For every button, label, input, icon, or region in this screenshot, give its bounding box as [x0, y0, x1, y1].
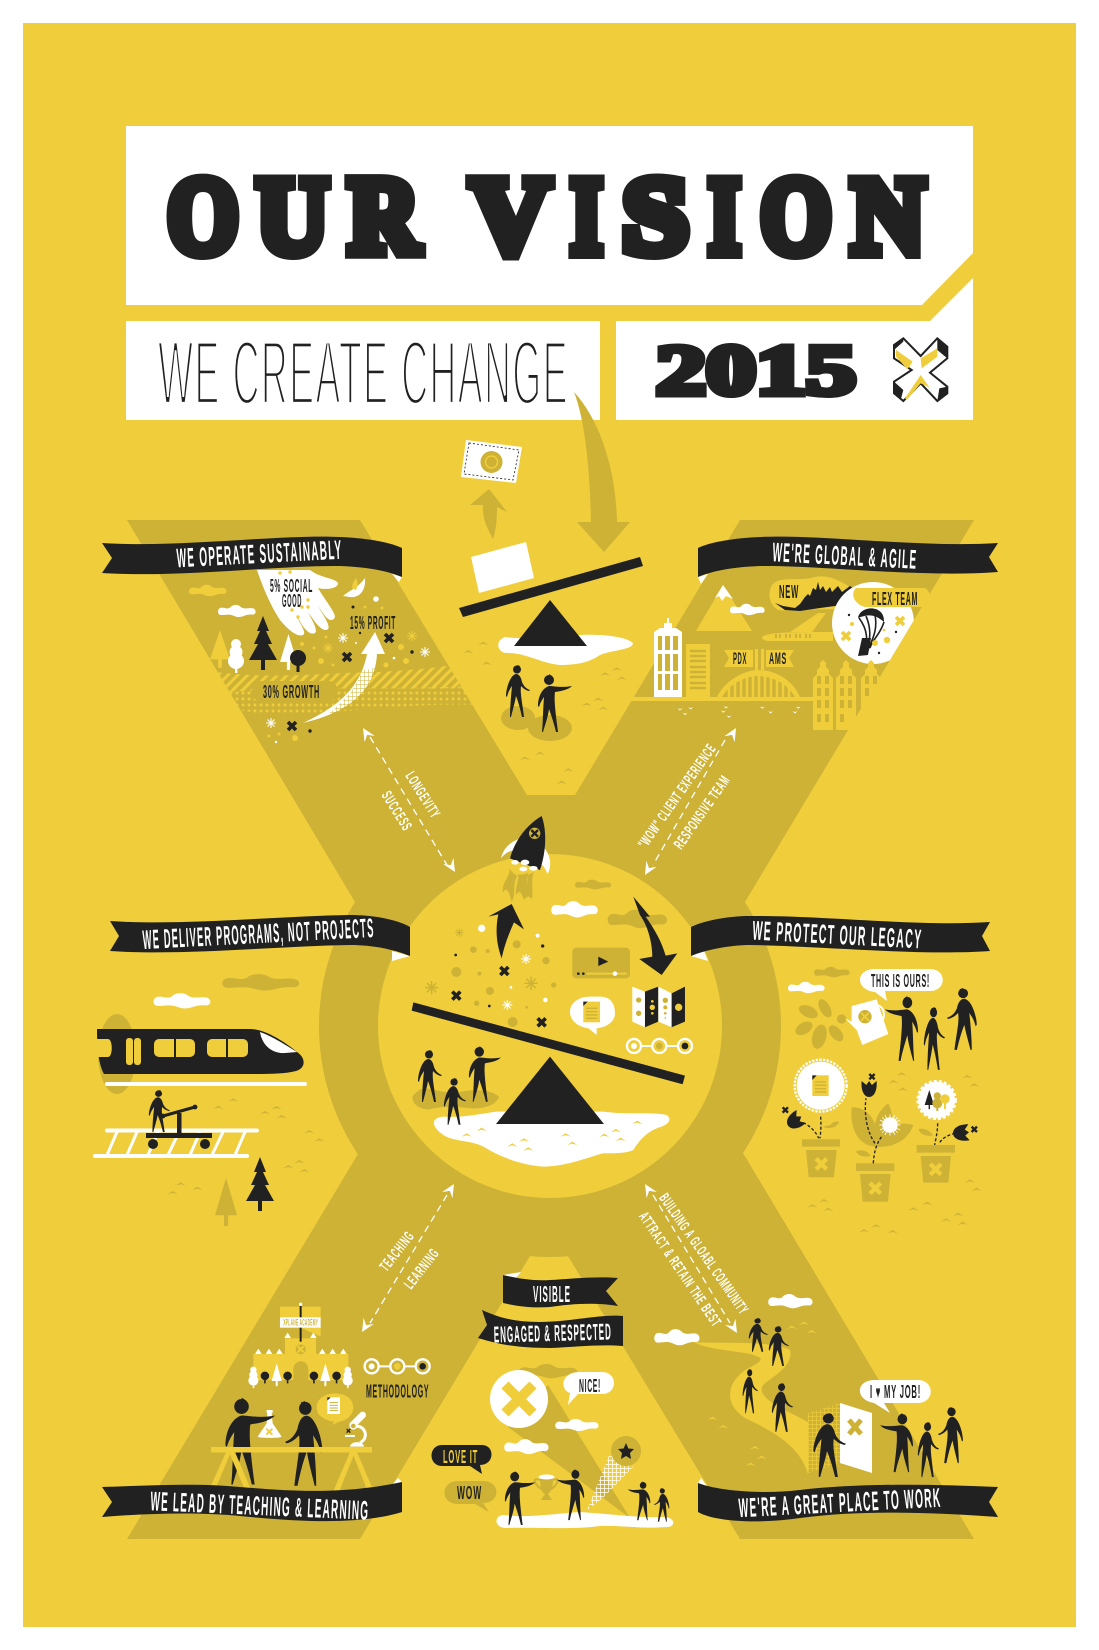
academy castle [253, 1303, 348, 1380]
large arrow down onto seesaw [574, 392, 630, 552]
shadows [412, 1089, 499, 1109]
text: WE LEAD BY TEACHING & LEARNING [150, 1486, 370, 1526]
panel: we operate sustainably: GOOD [282, 591, 302, 611]
trees [210, 616, 306, 673]
flower three disc [918, 1081, 955, 1119]
handcar [146, 1090, 212, 1149]
light wedge [508, 1385, 630, 1518]
icon: hand [257, 570, 338, 635]
striped building [686, 644, 710, 697]
speech bubble with document [570, 997, 615, 1035]
panel: we operate sustainably: 5% SOCIAL [270, 576, 313, 596]
year text: 2015 [656, 332, 856, 410]
logo X [894, 338, 947, 401]
clouds [189, 585, 256, 617]
title text: N [852, 156, 924, 276]
shadow oval [98, 1014, 136, 1094]
arrow down [633, 897, 677, 975]
ribbon [691, 916, 990, 961]
label: LEARNING [401, 1245, 443, 1292]
text: WE DELIVER PROGRAMS, NOT PROJECTS [142, 913, 375, 955]
seesaw load [471, 542, 534, 593]
winding road [693, 1342, 808, 1474]
hand dots [278, 570, 310, 619]
panel: central circle [412, 816, 692, 1167]
icon: trophy [535, 1474, 558, 1500]
big leaves [823, 1103, 933, 1157]
arrow up [488, 904, 524, 958]
title text: U [256, 156, 328, 276]
cloud [730, 604, 765, 615]
top seesaw [459, 542, 643, 741]
speech bubble: i love my job [860, 1380, 931, 1413]
method circles [627, 1039, 692, 1053]
ribbon [102, 535, 402, 582]
ribbon: engaged and respected [478, 1310, 623, 1348]
text: METHODOLOGY [366, 1381, 429, 1402]
title text [168, 156, 924, 276]
ribbon: visible [503, 1272, 618, 1307]
splash [793, 997, 846, 1050]
curved growth arrow [303, 632, 385, 723]
speech bubble: wow: WOW [457, 1483, 482, 1503]
bridge with pdx and ams flags [631, 649, 813, 701]
people [505, 1469, 669, 1525]
people [885, 988, 977, 1070]
seesaw bar [459, 557, 643, 617]
confetti [266, 596, 430, 743]
speech bubble: nice [563, 1372, 614, 1405]
ground [496, 1512, 673, 1528]
tower [654, 618, 682, 697]
video player [572, 948, 630, 978]
speech bubble: i love my job: I ♥ MY JOB! [870, 1382, 921, 1402]
speech bubble: love it: LOVE IT [443, 1447, 478, 1467]
year panel [616, 278, 973, 420]
ribbon: visible: VISIBLE [533, 1281, 571, 1307]
speech bubble: wow [444, 1481, 496, 1512]
dark cloud [519, 1364, 577, 1378]
method circles [365, 1359, 430, 1373]
speech bubble: this is ours [860, 969, 943, 1001]
panel: we protect our legacy [691, 916, 990, 1233]
flower pots [802, 1139, 955, 1202]
label: BUILDING A GLOABL COMMUNITY [655, 1190, 752, 1318]
trees [215, 1157, 274, 1226]
big X shape with central ring [127, 520, 974, 1539]
people [813, 1407, 963, 1477]
title panel [126, 126, 973, 305]
ribbon [698, 537, 998, 584]
seesaw bar [412, 1002, 685, 1084]
spotlight beam [587, 1453, 633, 1510]
flex team label [853, 588, 930, 609]
ribbon [102, 1478, 402, 1526]
hatched land [218, 666, 472, 712]
title text: I [570, 156, 602, 276]
label: "WOW" CLIENT EXPERIENCE [635, 741, 720, 852]
ribbon [110, 913, 410, 961]
people [418, 1046, 501, 1125]
title text: S [622, 156, 688, 276]
road people [743, 1318, 793, 1432]
icon: train [97, 1029, 304, 1074]
star disc [611, 1436, 641, 1466]
people [506, 665, 572, 732]
panel: visible engaged and respected [432, 1272, 673, 1528]
grass tufts [807, 1072, 982, 1233]
label: ATTRACT & RETAIN THE BEST [635, 1209, 725, 1330]
panel: we protect our legacy: THIS IS OURS! [871, 971, 930, 991]
open door [808, 1403, 872, 1473]
icon: leaf [343, 578, 365, 597]
icon: plane [762, 613, 835, 641]
flower one disc [795, 1060, 847, 1112]
ribbon [698, 1478, 998, 1523]
bridge with pdx and ams flags: PDX [733, 649, 747, 668]
island tufts [462, 1121, 642, 1151]
shadows [501, 706, 572, 741]
island [498, 635, 633, 665]
clouds [551, 880, 667, 928]
island [434, 1112, 669, 1167]
train rail [105, 1082, 307, 1086]
panel: we're global and agile [631, 537, 998, 730]
connector: longevity and success [358, 725, 460, 875]
track [95, 1130, 257, 1156]
stems [803, 1098, 955, 1163]
icon: x disc [490, 1370, 548, 1428]
folded map [632, 987, 685, 1027]
icon: mountain [696, 585, 752, 631]
panel: we're global and agile: FLEX TEAM [872, 589, 918, 609]
panel: we lead by teaching and learning [102, 1303, 430, 1526]
academy castle: XPLANE ACADEMY [283, 1318, 318, 1328]
panel: we're a great place to work [654, 1294, 998, 1523]
small arrow up [470, 489, 507, 539]
connector: community [635, 1181, 752, 1336]
title text: R [348, 156, 421, 276]
connector: teaching and learning [357, 1181, 459, 1335]
people [225, 1398, 322, 1486]
confetti [425, 925, 556, 1027]
icon: watering can [845, 999, 888, 1045]
speech bubble: love it [432, 1445, 492, 1474]
clouds [654, 1294, 813, 1345]
new york skyline bubble [770, 576, 858, 612]
castle trees [248, 1363, 353, 1388]
speech bubble with document [317, 1393, 353, 1425]
growth label background [252, 681, 337, 701]
tulips [783, 1074, 977, 1142]
grass tufts [707, 1322, 817, 1466]
ribbon: WE OPERATE SUSTAINABLY [176, 535, 343, 573]
label: SUCCESS [378, 788, 415, 834]
subtitle panel [126, 321, 600, 424]
flex team circle [832, 582, 914, 664]
panel: we operate sustainably [102, 535, 480, 743]
ticket icon [461, 440, 522, 483]
label: TEACHING [377, 1228, 418, 1275]
title text: O [760, 156, 832, 276]
parachute figure [858, 608, 884, 656]
seesaw pivot [496, 1057, 604, 1124]
connector: wow client experience [635, 725, 741, 878]
icon: rocket [501, 816, 550, 902]
panel: we deliver programs [95, 913, 410, 1226]
pivot triangle [514, 600, 587, 646]
social good label [270, 576, 313, 611]
new york skyline bubble: NEW [779, 582, 799, 602]
clouds [504, 1419, 599, 1454]
panel: we operate sustainably: 15% PROFIT [350, 613, 396, 633]
title text: O [168, 156, 238, 276]
label: LONGEVITY [402, 769, 444, 822]
grass tufts top centre [463, 642, 627, 784]
title text: V [470, 156, 550, 276]
title text: I [708, 156, 740, 276]
dutch houses [813, 660, 881, 730]
grass tufts [168, 1098, 324, 1194]
lab table [209, 1447, 374, 1492]
panel: we operate sustainably: 30% GROWTH [263, 682, 320, 702]
white sun [879, 1114, 901, 1136]
birds [677, 706, 801, 718]
bridge with pdx and ams flags: AMS [769, 649, 787, 668]
label: RESPONSIVE TEAM [671, 772, 734, 852]
clouds [788, 967, 850, 993]
speech bubble: nice: NICE! [579, 1376, 601, 1396]
panel: visible engaged and respected: ENGAGED & RESPECTED [493, 1318, 612, 1348]
clouds [154, 974, 299, 1008]
flask [258, 1410, 282, 1438]
microscope [345, 1415, 365, 1447]
